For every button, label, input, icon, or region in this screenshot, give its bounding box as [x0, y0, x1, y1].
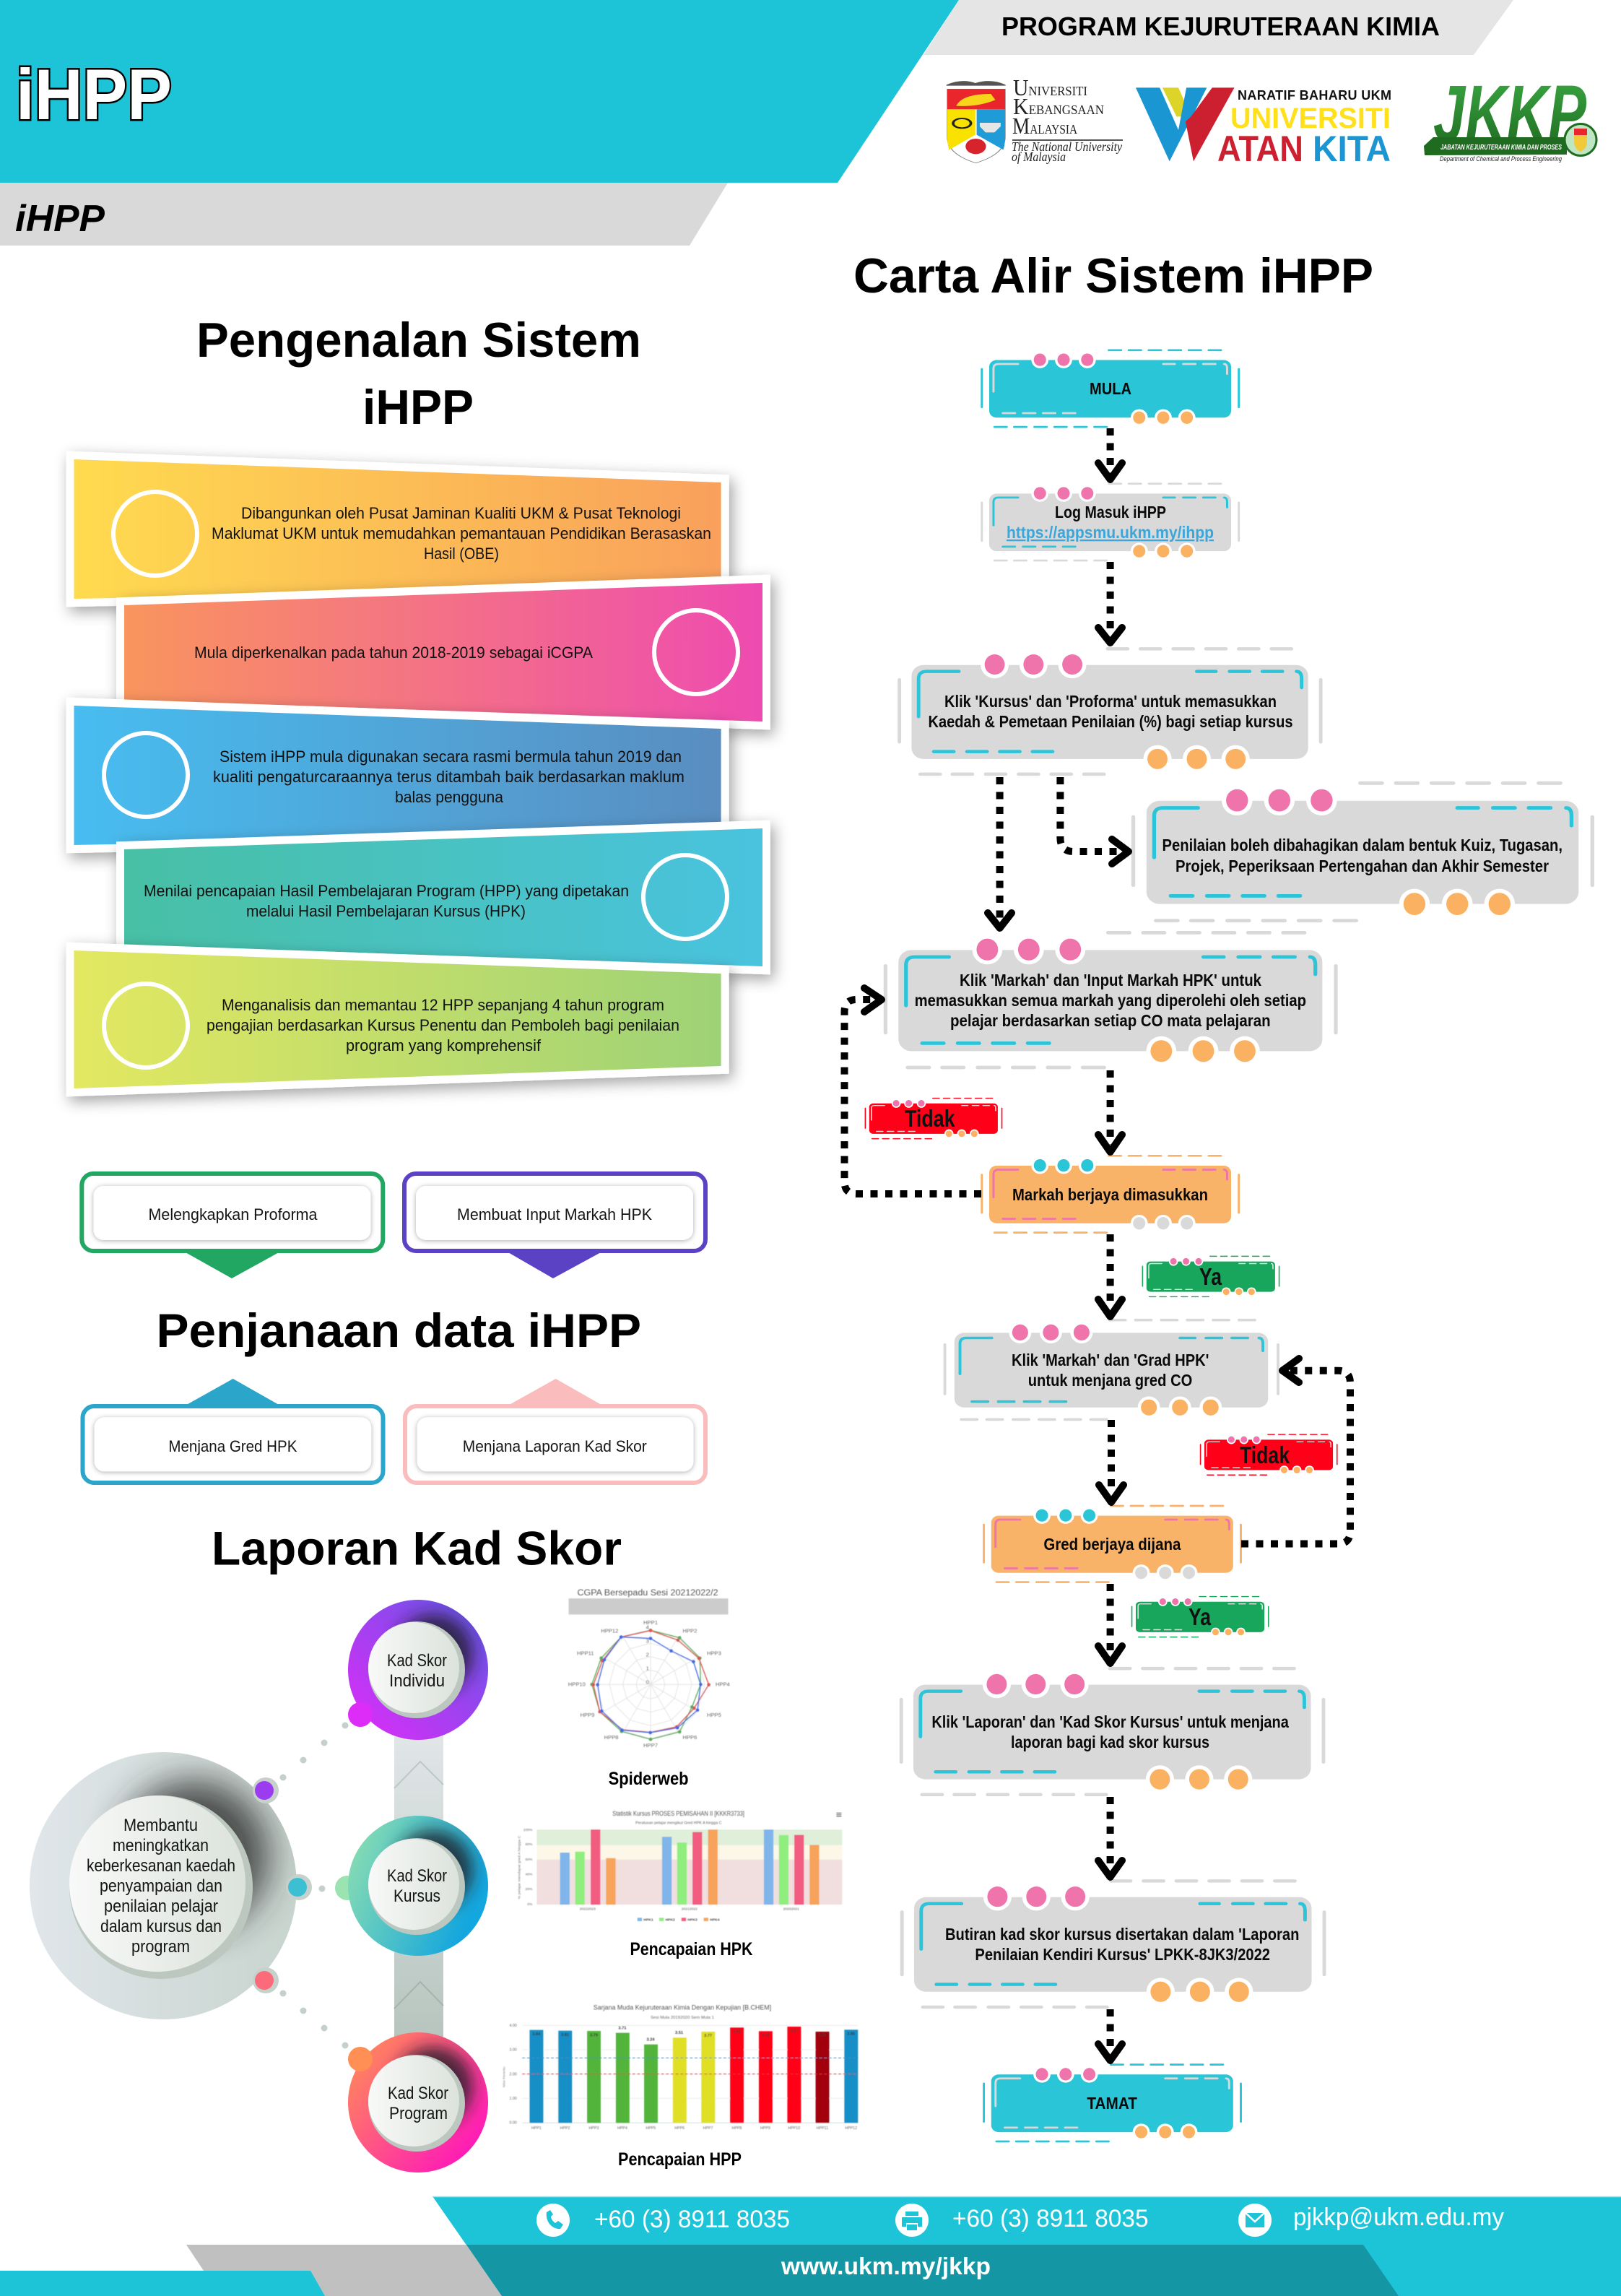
chart: Pencapaian HPK bars: 40% [526, 1873, 533, 1877]
chart: spiderweb radar: 2 [646, 1651, 649, 1658]
logo: Universiti Kebangsaan Malaysia: of Malaysia [1012, 150, 1066, 164]
logo: JKKP: JABATAN KEJURUTERAAN KIMIA DAN PROSES [1440, 144, 1562, 152]
flow: MULA: MULA [1090, 379, 1131, 398]
flow: Penilaian note: Projek, Peperiksaan Pertengahan dan Akhir Semester [1175, 857, 1549, 875]
title: iHPP: iHPP [16, 54, 172, 134]
chart: spiderweb radar: HPP3 [707, 1650, 721, 1656]
panel: central disc: program [131, 1937, 190, 1957]
ribbon 4: Menilai pencapaian Hasil Pembelajaran Program (HPP) yang dipetakan [144, 882, 629, 900]
flow: Ya label 1 [1142, 1256, 1279, 1296]
chart: Pencapaian HPP bars: HPP12 [845, 2126, 857, 2131]
arrow: loop back Tidak to Markah input [845, 988, 981, 1194]
header: programme tab [924, 0, 1513, 55]
chart: Pencapaian HPP bars: 1.00 [509, 2097, 517, 2101]
panel: central disc: penilaian pelajar [104, 1897, 218, 1916]
ribbon 1: Maklumat UKM untuk memudahkan pemantauan Pendidikan Berasaskan [212, 524, 711, 542]
panel: central disc: penyampaian dan [100, 1876, 222, 1896]
logo: Universiti Kebangsaan Malaysia [947, 74, 1123, 164]
heading: Pengenalan Sistem iHPP: iHPP [362, 380, 474, 435]
chart: Pencapaian HPP bars: HPP2 [560, 2126, 570, 2131]
chart: Pencapaian HPK bars: HPK1 [643, 1918, 653, 1923]
chart: Pencapaian HPP bars: 3.24 [647, 2037, 655, 2042]
ribbon 5: pengajian berdasarkan Kursus Penentu dan Pemboleh bagi penilaian [207, 1016, 679, 1034]
logo: Naratif Baharu UKM Universiti Watan Kita: UNIVERSITI [1230, 103, 1391, 134]
flow: Markah berjaya dimasukkan: Markah berjaya dimasukkan [1012, 1185, 1208, 1204]
flow: Klik Markah dan Input Markah HPK: memasukkan semua markah yang diperolehi oleh setiap [915, 991, 1306, 1010]
logo: Universiti Kebangsaan Malaysia: UNIVERSITI [1013, 74, 1087, 100]
box: Membuat Input Markah HPK [404, 1174, 705, 1278]
logo: JKKP: Department of Chemical and Process Engineering [1440, 155, 1563, 163]
flow: Klik Kursus dan Proforma: Klik 'Kursus' dan 'Proforma' untuk memasukkan [944, 692, 1277, 711]
arrow: Mula to Log Masuk [1098, 428, 1122, 480]
ribbon 1: Dibangunkan oleh Pusat Jaminan Kualiti UKM & Pusat Teknologi [241, 504, 681, 522]
flow: Gred berjaya dijana: Gred berjaya dijana [1043, 1535, 1181, 1554]
caption: Pencapaian HPK: Pencapaian HPK [630, 1939, 752, 1959]
chart: spiderweb radar: HPP9 [580, 1712, 594, 1718]
header: programme tab: PROGRAM KEJURUTERAAN KIMIA [1001, 12, 1440, 41]
chart: Pencapaian HPP bars: 3.00 [509, 2048, 517, 2053]
chart: Pencapaian HPK bars: HPK4 [710, 1918, 720, 1923]
chart: Pencapaian HPP bars: HPP11 [817, 2126, 828, 2131]
chart: Pencapaian HPK bars: 20222023 [580, 1907, 596, 1912]
chart: spiderweb radar: 3 [646, 1638, 649, 1645]
chart: Pencapaian HPP bars: 3.71 [618, 2027, 626, 2031]
node: teal dot [286, 1874, 312, 1900]
chart: Pencapaian HPP bars: HPP8 [731, 2126, 742, 2131]
flow: Butiran kad skor kursus: Penilaian Kendiri Kursus' LPKK-8JK3/2022 [975, 1945, 1270, 1964]
arrow: Klik Grad to Gred berjaya [1099, 1420, 1124, 1502]
flow: Tidak label 2 [1201, 1434, 1337, 1475]
chart: Pencapaian HPK bars: HPK2 [666, 1918, 675, 1923]
arrow: Laporan to Butiran [1098, 1797, 1122, 1877]
sub-banner: iHPP: iHPP [15, 198, 105, 240]
flow: Markah berjaya dimasukkan [982, 1156, 1239, 1233]
box: Melengkapkan Proforma: Melengkapkan Proforma [149, 1205, 318, 1223]
heading: Carta Alir Sistem iHPP: Carta Alir Sistem iHPP [853, 248, 1373, 303]
chart: Pencapaian HPP bars: 3.76 [818, 2034, 826, 2038]
chart: spiderweb radar: HPP8 [604, 1734, 619, 1741]
caption: Pencapaian HPP: Pencapaian HPP [618, 2149, 742, 2170]
flow: Klik Markah dan Input Markah HPK: pelajar berdasarkan setiap CO mata pelajaran [950, 1011, 1271, 1030]
chart: Pencapaian HPK bars [518, 1810, 842, 1923]
chart: Pencapaian HPK bars: Statistik Kursus PROSES PEMISAHAN II [KKKR3733] [612, 1810, 744, 1817]
chart: spiderweb radar: 1 [646, 1665, 649, 1672]
chart: spiderweb radar: HPP4 [716, 1681, 731, 1688]
logo: Naratif Baharu UKM Universiti Watan Kita: ATAN [1217, 129, 1303, 169]
chart: Pencapaian HPP bars: Nilai Perentu [502, 2066, 506, 2087]
ring: Kad Skor Individu [348, 1600, 488, 1740]
box: Menjana Laporan Kad Skor: Menjana Laporan Kad Skor [463, 1437, 647, 1455]
chart: Pencapaian HPK bars: Peratusan pelajar mengikut Gred HPK A hingga C [635, 1821, 722, 1826]
ring: Kad Skor Program [348, 2032, 488, 2172]
arrow: berjaya to Klik Markah Grad [1098, 1234, 1122, 1317]
chart: Pencapaian HPP bars: 3.77 [704, 2034, 712, 2038]
ribbon 2 [124, 583, 762, 722]
sub-banner: iHPP [0, 183, 728, 246]
flow: Klik Markah dan Grad HPK: untuk menjana gred CO [1028, 1371, 1192, 1390]
chart: Pencapaian HPK bars: 80% [526, 1842, 533, 1847]
flow: Tidak label 1 [865, 1099, 1002, 1139]
ribbon 4 [124, 828, 762, 966]
chart: spiderweb radar: 0 [646, 1679, 649, 1686]
footer: phone contact: +60 (3) 8911 8035 [594, 2206, 790, 2233]
box: Menjana Gred HPK [82, 1379, 383, 1483]
flow: MULA [982, 350, 1239, 427]
ribbon 3: kualiti pengaturcaraannya terus ditambah baik berdasarkan maklum [213, 768, 685, 786]
chart: Pencapaian HPP bars: HPP1 [531, 2126, 542, 2131]
chart: Pencapaian HPP bars [502, 2003, 859, 2131]
chart: Pencapaian HPP bars: HPP10 [788, 2126, 800, 2131]
chart: spiderweb radar [568, 1587, 731, 1749]
flow: Klik Laporan dan Kad Skor Kursus: Klik 'Laporan' dan 'Kad Skor Kursus' untuk menjana [931, 1712, 1289, 1731]
chart: Pencapaian HPP bars: 3.79 [590, 2034, 598, 2038]
chart: Pencapaian HPP bars: HPP5 [646, 2126, 656, 2131]
flow: Penilaian note [1134, 783, 1592, 921]
chart: Pencapaian HPP bars: 2.00 [509, 2072, 517, 2076]
heading: Pengenalan Sistem iHPP [196, 313, 641, 435]
flow: Klik Markah dan Grad HPK: Klik 'Markah' dan 'Grad HPK' [1012, 1351, 1209, 1369]
ring: Kad Skor Program: Program [389, 2104, 448, 2123]
chart: Pencapaian HPP bars: 3.81 [561, 2033, 569, 2037]
diagram: dotted links [280, 1722, 348, 2048]
flow: Ya label 1: Ya [1199, 1263, 1222, 1290]
flow: Klik Markah dan Input Markah HPK: Klik 'Markah' dan 'Input Markah HPK' untuk [960, 971, 1261, 989]
chart: Pencapaian HPP bars: 3.97 [790, 2029, 798, 2033]
arrow: loop back Tidak to Klik Grad [1241, 1359, 1350, 1544]
box: Menjana Laporan Kad Skor [405, 1379, 705, 1483]
box: Melengkapkan Proforma [82, 1174, 383, 1278]
caption: Spiderweb: Spiderweb [609, 1769, 689, 1789]
ring: Kad Skor Kursus: Kursus [394, 1886, 440, 1906]
chart: spiderweb radar: HPP7 [643, 1742, 658, 1749]
chart: Pencapaian HPP bars: 3.51 [675, 2031, 683, 2035]
chart: Pencapaian HPP bars: HPP6 [674, 2126, 685, 2131]
footer: fax contact [895, 2204, 1149, 2237]
chart: spiderweb radar: CGPA Bersepadu Sesi 20212022/2 [578, 1587, 718, 1598]
chart: Pencapaian HPK bars: 100% [523, 1828, 533, 1832]
flow: Log Masuk iHPP: Log Masuk iHPP [1055, 503, 1166, 521]
footer: fax contact: +60 (3) 8911 8035 [952, 2205, 1149, 2232]
panel: central disc: dalam kursus dan [100, 1917, 222, 1936]
node: purple dot [253, 1777, 279, 1803]
footer: website: www.ukm.my/jkkp [781, 2253, 991, 2279]
arrow: Kursus to Markah [988, 777, 1012, 928]
chart: Pencapaian HPP bars: HPP3 [588, 2126, 599, 2131]
footer: email contact: pjkkp@ukm.edu.my [1293, 2204, 1504, 2231]
ring: Kad Skor Kursus: Kad Skor [387, 1866, 447, 1886]
ribbon 5 [74, 950, 721, 1088]
arrow: Kursus to Penilaian [1060, 777, 1129, 864]
chart: Pencapaian HPP bars: HPP7 [703, 2126, 713, 2131]
chart: spiderweb radar: HPP10 [568, 1681, 586, 1688]
footer: email contact [1238, 2204, 1504, 2237]
arrow: Markah input to berjaya [1098, 1070, 1122, 1152]
flow: Log Masuk iHPP [982, 484, 1239, 560]
ring: Kad Skor Program: Kad Skor [388, 2084, 448, 2103]
chart: Pencapaian HPK bars: 20202021 [783, 1907, 799, 1912]
chart: spiderweb radar: HPP11 [577, 1650, 594, 1656]
flow: Penilaian note: Penilaian boleh dibahagikan dalam bentuk Kuiz, Tugasan, [1162, 836, 1563, 854]
panel: central disc: meningkatkan [113, 1836, 209, 1855]
ribbon 3 [74, 706, 721, 845]
ribbon 5: program yang komprehensif [346, 1036, 542, 1054]
flow: Butiran kad skor kursus: Butiran kad skor kursus disertakan dalam 'Laporan [945, 1925, 1299, 1944]
chart: Pencapaian HPP bars: 4.00 [509, 2024, 517, 2028]
chart: spiderweb radar: HPP1 [643, 1619, 658, 1626]
chart: Pencapaian HPP bars: Sesi Mula 20192020 Sem Mula 1 [651, 2016, 714, 2020]
flow: Gred berjaya dijana [984, 1506, 1240, 1582]
flow: Klik Kursus dan Proforma [900, 649, 1321, 774]
logo: Universiti Kebangsaan Malaysia: The National University [1012, 139, 1122, 154]
arrow: Gred to Laporan [1098, 1584, 1122, 1663]
chart: Pencapaian HPP bars: 3.84 [532, 2032, 541, 2037]
chart: Pencapaian HPP bars: 3.93 [733, 2030, 741, 2035]
ribbon 3: Sistem iHPP mula digunakan secara rasmi bermula tahun 2019 dan [220, 748, 682, 766]
chart: Pencapaian HPK bars: 20212022 [682, 1907, 697, 1912]
flow: Tidak label 1: Tidak [905, 1105, 955, 1132]
ribbon 1: Hasil (OBE) [424, 545, 499, 563]
logo: Universiti Kebangsaan Malaysia: KEBANGSAAN [1013, 93, 1104, 119]
arrow: Log Masuk to Kursus [1098, 562, 1122, 643]
chart: Pencapaian HPP bars: 0.00 [509, 2121, 517, 2126]
chart: spiderweb radar: HPP2 [682, 1628, 697, 1634]
flow: Klik Markah dan Grad HPK [945, 1320, 1278, 1419]
flow: Klik Laporan dan Kad Skor Kursus [901, 1668, 1324, 1795]
heading: Laporan Kad Skor: Laporan Kad Skor [212, 1521, 622, 1574]
chart: Pencapaian HPK bars: 0% [527, 1902, 533, 1907]
footer: phone contact [536, 2204, 790, 2237]
box: Menjana Gred HPK: Menjana Gred HPK [168, 1437, 297, 1455]
flow: TAMAT: TAMAT [1087, 2094, 1137, 2113]
ring: Kad Skor Individu: Kad Skor [387, 1651, 447, 1671]
chart: spiderweb radar: HPP5 [707, 1712, 721, 1718]
chart: Pencapaian HPK bars: 60% [526, 1858, 533, 1862]
ribbon 5: Menganalisis dan memantau 12 HPP sepanjang 4 tahun program [222, 996, 664, 1014]
chart: Pencapaian HPK bars: % pelajar mendapat gred A hingga C [518, 1835, 522, 1899]
chart: spiderweb radar: HPP6 [682, 1734, 697, 1741]
flow: Klik Markah dan Input Markah HPK [885, 932, 1336, 1067]
ring: Kad Skor Individu: Individu [389, 1671, 445, 1691]
panel: central disc: Membantu [123, 1816, 198, 1835]
flow: Klik Laporan dan Kad Skor Kursus: laporan bagi kad skor kursus [1011, 1733, 1209, 1751]
logo: Naratif Baharu UKM Universiti Watan Kita: KITA [1313, 129, 1391, 169]
chart: Pencapaian HPP bars: 3.78 [761, 2034, 769, 2038]
logo: Naratif Baharu UKM Universiti Watan Kita [1136, 87, 1391, 169]
flow: Ya label 2 [1132, 1597, 1269, 1637]
flow: Butiran kad skor kursus [902, 1881, 1324, 2007]
node: orange dot [253, 1967, 279, 1993]
heading: Pengenalan Sistem iHPP: Pengenalan Sistem [196, 313, 641, 368]
chart: spiderweb radar: HPP12 [601, 1628, 618, 1634]
flow: Log Masuk iHPP: https://appsmu.ukm.my/ihpp [1007, 523, 1214, 542]
flow: Ya label 2: Ya [1188, 1603, 1212, 1630]
chart: Pencapaian HPP bars: HPP4 [617, 2126, 627, 2131]
panel: central disc: keberkesanan kaedah [87, 1856, 235, 1876]
footer: bands [0, 2196, 1621, 2296]
flow: TAMAT [984, 2065, 1240, 2141]
ring: Kad Skor Kursus [335, 1816, 488, 1956]
ribbon 1 [74, 459, 721, 599]
panel: introduction ribbons [74, 459, 762, 1088]
diagram: Kad Skor connector column [394, 1733, 443, 2045]
logo: Universiti Kebangsaan Malaysia: MALAYSIA [1012, 113, 1077, 139]
header: teal banner [0, 0, 959, 183]
chart: Pencapaian HPK bars: HPK3 [687, 1918, 697, 1923]
chart: spiderweb radar: 4 [646, 1624, 650, 1630]
panel: central disc [30, 1752, 297, 2019]
flow: Tidak label 2: Tidak [1240, 1442, 1290, 1468]
logo: Naratif Baharu UKM Universiti Watan Kita: NARATIF BAHARU UKM [1238, 88, 1391, 103]
ribbon 3: balas pengguna [395, 788, 504, 806]
chart: Pencapaian HPP bars: HPP9 [760, 2126, 770, 2131]
chart: Pencapaian HPK bars: 20% [526, 1887, 533, 1892]
ribbon 2: Mula diperkenalkan pada tahun 2018-2019 sebagai iCGPA [194, 644, 593, 662]
chart: Pencapaian HPP bars: 3.85 [847, 2032, 855, 2036]
heading: Penjanaan data iHPP: Penjanaan data iHPP [156, 1304, 641, 1357]
flow: Klik Kursus dan Proforma: Kaedah & Pemetaan Penilaian (%) bagi setiap kursus [929, 712, 1292, 731]
chart: Pencapaian HPP bars: Sarjana Muda Kejuruteraan Kimia Dengan Kepujian [B.CHEM] [594, 2003, 771, 2011]
arrow: Butiran to Tamat [1098, 2009, 1122, 2061]
box: Membuat Input Markah HPK: Membuat Input Markah HPK [457, 1205, 652, 1223]
ribbon 4: melalui Hasil Pembelajaran Kursus (HPK) [246, 902, 526, 920]
